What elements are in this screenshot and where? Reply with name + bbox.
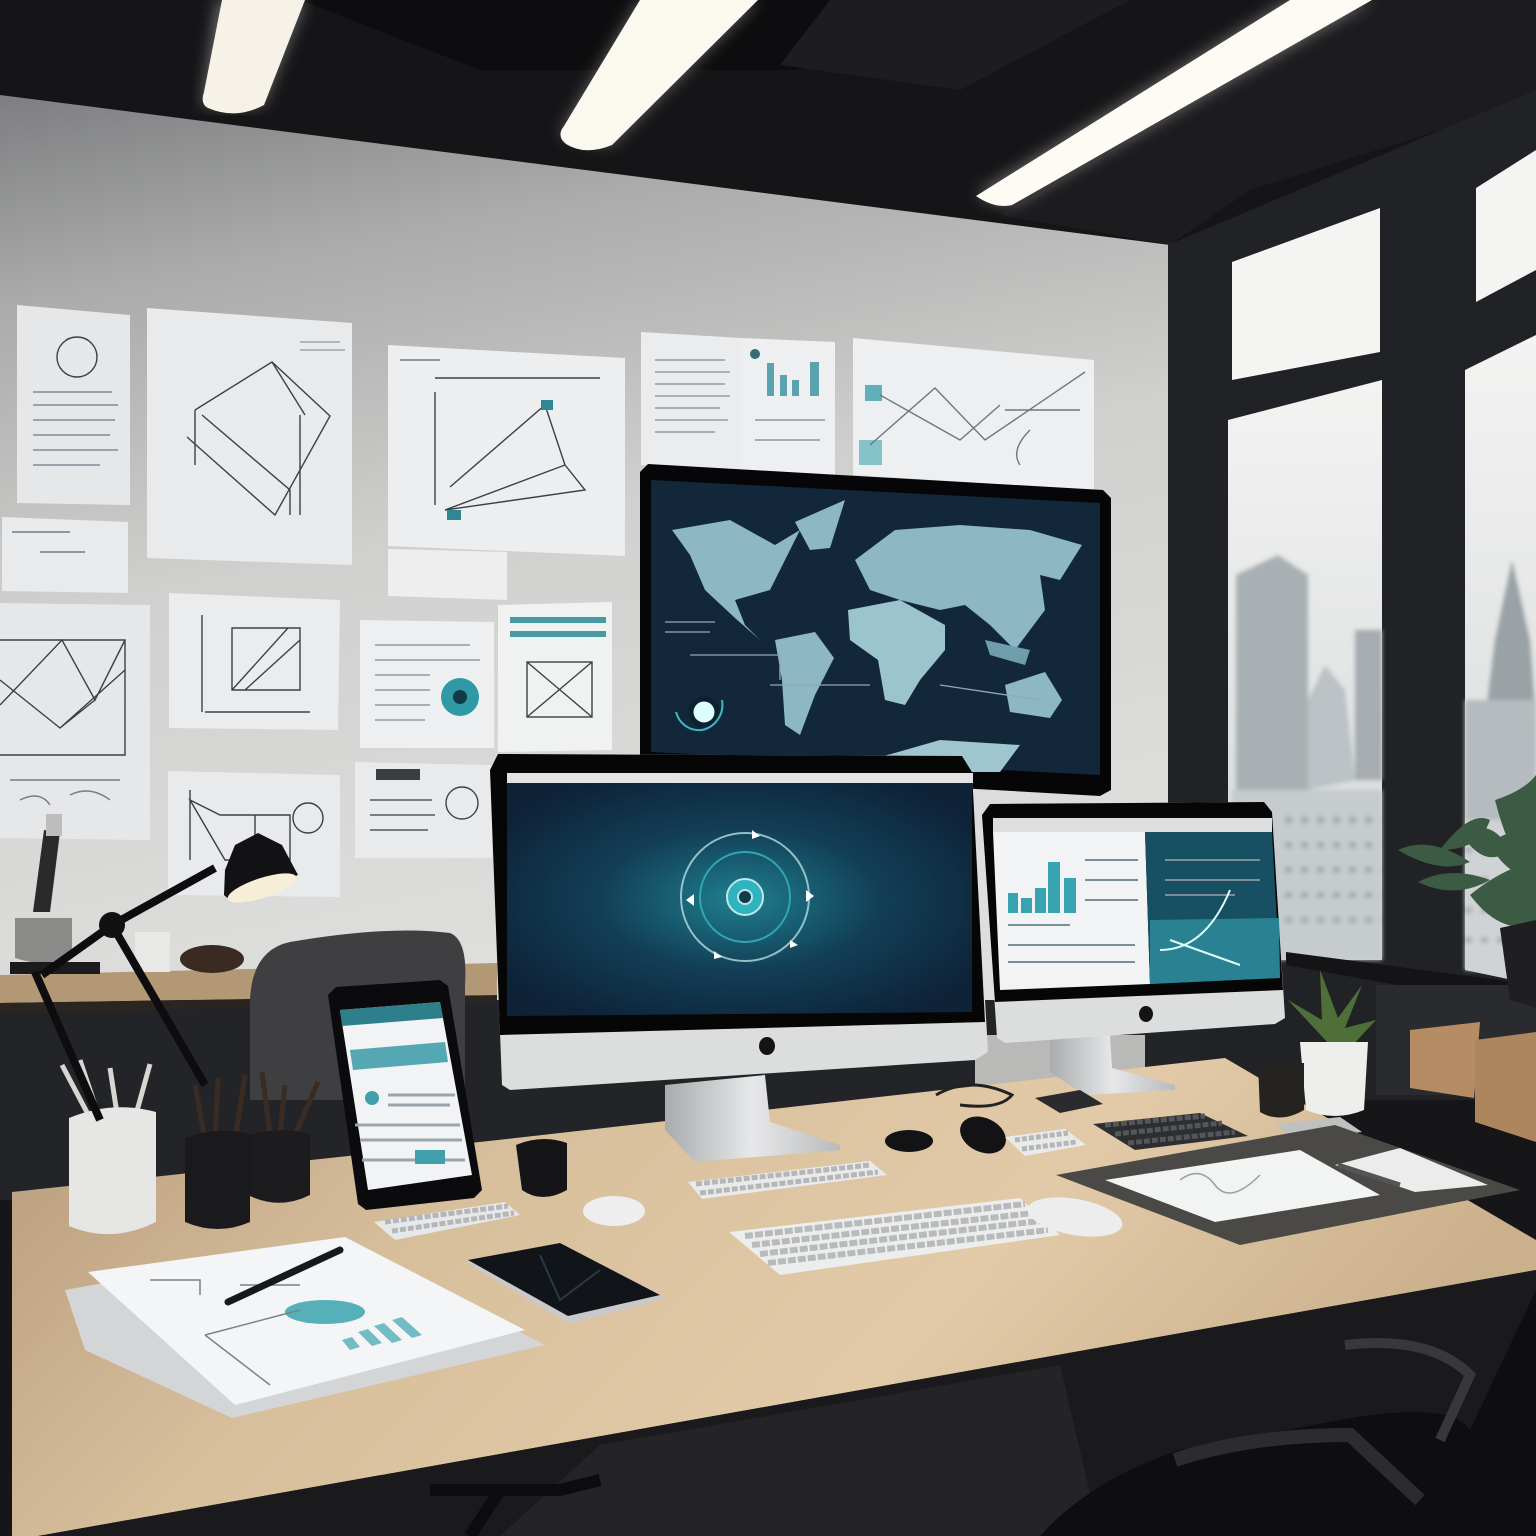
paper: dark header note [355, 762, 492, 858]
mug on shelf [15, 918, 72, 963]
front keyboard [729, 1198, 1060, 1275]
paper: small note [2, 517, 128, 593]
pen holders [62, 1060, 318, 1234]
world map [672, 500, 1082, 772]
small dark object [180, 945, 244, 973]
paper: sketch [168, 771, 340, 897]
paper: bar chart [741, 338, 835, 475]
apple-style logo [759, 1037, 775, 1055]
rear desk and chair area [0, 930, 1200, 1200]
plant pot [1500, 920, 1536, 1008]
window plant [1398, 775, 1536, 1008]
stand [1050, 1035, 1175, 1095]
rear keyboard [688, 1161, 887, 1199]
black keyboard [1093, 1113, 1248, 1150]
right iMac [982, 802, 1285, 1095]
small keyboard by tablet [374, 1202, 520, 1240]
tablet lying flat [465, 1243, 666, 1324]
black mice [885, 1109, 1012, 1161]
front mouse [1025, 1191, 1125, 1243]
desk mat and papers [1056, 1125, 1520, 1245]
pen [228, 1250, 340, 1302]
white holder [69, 1107, 156, 1234]
paper: teal node plot [388, 345, 625, 556]
dark mug [1258, 1063, 1304, 1118]
window lower left pane [1228, 380, 1382, 960]
map target icon [676, 699, 722, 730]
window upper right pane [1476, 150, 1536, 302]
black holder back [250, 1130, 310, 1203]
paper stack with charts [65, 1237, 545, 1418]
paper: square diagram [169, 593, 340, 730]
cable and phone [936, 1085, 1103, 1113]
screen white panel [993, 832, 1150, 990]
black holder [185, 1131, 250, 1229]
paper: scatter diagram [853, 338, 1094, 490]
black mug [516, 1139, 567, 1197]
teal bars [342, 1317, 422, 1350]
teal blob [285, 1300, 365, 1324]
desk front shadow [38, 1270, 1536, 1536]
chair base under desk [430, 1480, 600, 1536]
window lower right pane [1465, 335, 1536, 985]
paper: circle note [17, 305, 130, 505]
body [490, 754, 988, 1090]
right wall with windows [1168, 90, 1536, 1100]
screen [507, 783, 972, 1016]
paper: line diagram [147, 308, 352, 565]
office chair [250, 930, 465, 1100]
logo [1139, 1006, 1153, 1022]
paper: blank note [388, 549, 507, 600]
potted plant on desk [1258, 970, 1376, 1118]
desk lamp small [33, 830, 60, 912]
city skyline [1232, 555, 1536, 970]
white mouse [583, 1196, 645, 1226]
wall charts and papers [0, 305, 1094, 897]
tablet upright [328, 980, 482, 1210]
large wall monitor [640, 464, 1111, 796]
white cup [135, 932, 170, 972]
wooden boxes [1410, 1022, 1536, 1142]
ceiling [0, 0, 1536, 300]
center iMac [490, 754, 988, 1162]
screen teal panel [1145, 832, 1280, 984]
paper: teal circle page [360, 620, 494, 748]
shelf objects [10, 814, 244, 974]
main desk [12, 1058, 1536, 1536]
window upper left pane [1232, 208, 1380, 380]
paper: zig-zag chart [0, 603, 150, 840]
ceiling lights [203, 0, 1372, 206]
desk lamp [35, 833, 299, 1120]
stand [665, 1075, 840, 1162]
small device [1275, 1117, 1362, 1140]
small white keyboard [1005, 1129, 1086, 1156]
body [982, 802, 1285, 1043]
screen bars [1008, 862, 1076, 913]
orbit icon [681, 830, 814, 961]
back wall [0, 95, 1170, 1000]
floor carpet [500, 1365, 1100, 1536]
window sill [1286, 952, 1536, 1010]
sketch lines [150, 1280, 300, 1385]
paper: table with box [498, 602, 612, 752]
paper: text page [641, 332, 741, 470]
foreground office chair [1040, 1290, 1536, 1536]
